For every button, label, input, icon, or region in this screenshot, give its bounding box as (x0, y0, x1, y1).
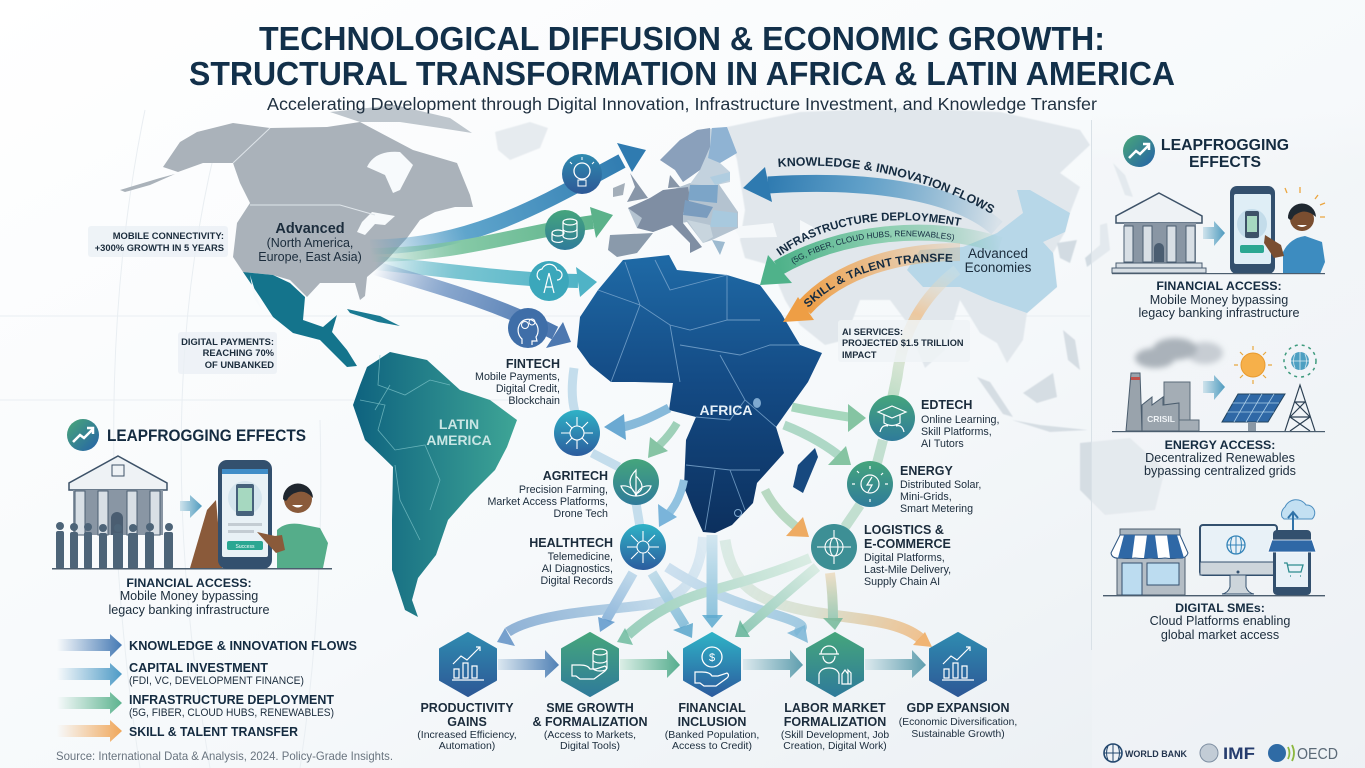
outcome: labor market formalization: Creation, Digital Work) (783, 741, 887, 752)
icon: right bank (1112, 193, 1206, 273)
icon circle: knowledge bulb (562, 154, 602, 194)
legend: infrastructure: (5G, FIBER, CLOUD HUBS, RENEWABLES) (129, 707, 334, 719)
map: East Asia advanced economies (907, 190, 1070, 313)
sector: healthtech: Digital Records (541, 575, 613, 587)
arrow: infrastructure deployment (760, 212, 994, 285)
heading: right leapfrogging: LEAPFROGGING (1161, 137, 1289, 154)
outcome: productivity gains: GAINS (447, 715, 487, 729)
outcome: labor market formalization: FORMALIZATION (784, 715, 886, 729)
legend (57, 634, 357, 742)
map: Latin America (243, 272, 517, 617)
sector: agritech: Market Access Platforms, (487, 496, 608, 508)
icon: arrow to mobile (180, 495, 202, 518)
icon circle: capital coins (545, 210, 585, 250)
sector: agritech: Drone Tech (554, 508, 608, 520)
text: left financial access: FINANCIAL ACCESS: (126, 576, 252, 590)
outcome: labor market formalization (781, 633, 889, 752)
title: TECHNOLOGICAL DIFFUSION & ECONOMIC GROWTH: (259, 20, 1105, 57)
icon: solar, sun, tower (1112, 345, 1325, 432)
arrows: Africa to sectors (572, 368, 866, 537)
icon: right arrow energy (1203, 375, 1225, 400)
text: digital SMEs (1150, 601, 1290, 642)
outcome: SME growth: & FORMALIZATION (532, 715, 648, 729)
label: Latin America: LATIN (439, 416, 479, 432)
heading: right leapfrogging: EFFECTS (1189, 154, 1261, 171)
sector: energy: Mini-Grids, (900, 491, 952, 503)
sector: logistics and e-commerce: Supply Chain AI (864, 576, 940, 588)
text: left financial access: legacy banking infrastructure (108, 603, 270, 617)
text: right financial access: legacy banking infrastructure (1138, 306, 1300, 320)
arrow: infrastructure deployment: (5G, FIBER, CLOUD HUBS, RENEWABLES) (792, 230, 954, 264)
sector: logistics and e-commerce: E-COMMERCE (864, 537, 951, 551)
text: right financial access: Mobile Money bypassing (1150, 293, 1288, 307)
arrow: infrastructure deployment: INFRASTRUCTURE DEPLOYMENT (776, 212, 962, 256)
sector: agritech: Precision Farming, (519, 484, 608, 496)
sector: logistics and e-commerce (811, 523, 951, 588)
icon circle: AI head (508, 308, 548, 348)
text: energy access: ENERGY ACCESS: (1165, 438, 1275, 452)
sector: healthtech: AI Diagnostics, (542, 563, 613, 575)
outcome: GDP expansion: GDP EXPANSION (906, 701, 1010, 715)
panel: right leapfrogging effects (1091, 112, 1365, 768)
legend: skill (57, 720, 298, 742)
text: left financial access (108, 576, 270, 617)
legend: knowledge: KNOWLEDGE & INNOVATION FLOWS (129, 638, 357, 653)
outcome: productivity gains: (Increased Efficiency, (417, 729, 517, 741)
legend: infrastructure (57, 692, 334, 719)
heading: left leapfrogging (67, 419, 306, 451)
sector: edtech: Online Learning, (921, 414, 999, 426)
outcome: SME growth (532, 633, 648, 752)
callout: mobile connectivity: +300% GROWTH IN 5 YEARS (95, 242, 224, 253)
title: STRUCTURAL TRANSFORMATION IN AFRICA & LATIN AMERICA (189, 55, 1175, 92)
sector: edtech (869, 395, 999, 450)
heading: left leapfrogging: LEAPFROGGING EFFECTS (107, 426, 306, 445)
outcome: GDP expansion: (Economic Diversification, (899, 717, 1017, 728)
callout: digital payments: OF UNBANKED (205, 359, 274, 370)
outcome: GDP expansion (899, 633, 1017, 740)
sector: logistics and e-commerce: Digital Platforms, (864, 552, 945, 564)
label: advanced North America: Advanced (275, 221, 345, 237)
logos: World Bank, IMF, OECD (1104, 744, 1338, 763)
sector: energy: Distributed Solar, (900, 479, 981, 491)
legend: capital (57, 660, 304, 687)
subtitle: Accelerating Development through Digital Innovation, Infrastructure Investment, and Knowledge Transfer (267, 94, 1097, 114)
outcome: financial inclusion: FINANCIAL (678, 701, 746, 715)
outcome: GDP expansion: Sustainable Growth) (911, 729, 1005, 740)
callout: mobile connectivity (88, 226, 228, 257)
sector: fintech (475, 357, 600, 456)
icon: bank with queue (52, 456, 332, 570)
callout: AI services: IMPACT (842, 350, 877, 360)
icon: right mobile money (1112, 186, 1325, 274)
text: right financial access: FINANCIAL ACCESS: (1156, 279, 1282, 293)
icon: storefront (1111, 529, 1188, 595)
label: advanced North America: Europe, East Asia) (258, 250, 362, 264)
text: right financial access (1138, 279, 1300, 320)
label: advanced economies: Economies (965, 260, 1032, 275)
callout: AI services (838, 320, 970, 362)
arrow: skill and talent transfer (783, 243, 960, 322)
label: advanced economies: Advanced (968, 246, 1028, 261)
callout: mobile connectivity: MOBILE CONNECTIVITY: (113, 230, 224, 241)
sector: energy (847, 461, 981, 515)
outcome: productivity gains (417, 633, 517, 752)
outcome: productivity gains: Automation) (439, 740, 495, 752)
outcome: financial inclusion: INCLUSION (678, 715, 746, 729)
sector: logistics and e-commerce: LOGISTICS & (864, 523, 944, 537)
outcome: labor market formalization: LABOR MARKET (784, 701, 886, 715)
sector: fintech: Mobile Payments, (475, 371, 560, 383)
legend: capital: (FDI, VC, DEVELOPMENT FINANCE) (129, 675, 304, 687)
arrow heads: outcomes (497, 615, 932, 647)
icon: factory and smoke: CRISIL (1147, 414, 1175, 424)
outcome: SME growth: Digital Tools) (560, 740, 620, 752)
heading: right leapfrogging (1123, 135, 1289, 171)
flow: outcome arrows between hexagons (498, 650, 926, 678)
callout: AI services: PROJECTED $1.5 TRILLION (842, 338, 964, 348)
arrow: faint chain link right (845, 270, 957, 527)
callout: digital payments: REACHING 70% (203, 347, 275, 358)
sector: energy: Smart Metering (900, 503, 973, 515)
outcome: SME growth: (Access to Markets, (544, 729, 636, 741)
label: advanced North America (258, 221, 362, 264)
arrow: knowledge and innovation flows (743, 157, 1002, 234)
map: light world background (0, 108, 1165, 768)
sector: edtech: EDTECH (921, 398, 972, 412)
callout: AI services: AI SERVICES: (842, 327, 903, 337)
outcome: SME growth: SME GROWTH (546, 701, 634, 715)
icon: mobile money phone and person (190, 460, 328, 569)
map: Europe (608, 127, 738, 257)
legend: knowledge (57, 634, 357, 657)
legend: infrastructure: INFRASTRUCTURE DEPLOYMENT (129, 692, 334, 707)
icon circle: cloud tower (529, 261, 569, 301)
sector: agritech (487, 459, 659, 520)
text: left financial access: Mobile Money bypassing (120, 589, 258, 603)
icon: monitor with globe (1200, 525, 1277, 594)
text: energy access: Decentralized Renewables (1145, 451, 1295, 465)
legend: skill: SKILL & TALENT TRANSFER (129, 724, 298, 739)
icon: mobile money phone and person: Success (236, 544, 255, 550)
sector: energy: ENERGY (900, 464, 953, 478)
sector: fintech: Blockchain (508, 395, 560, 407)
legend: capital: CAPITAL INVESTMENT (129, 660, 268, 675)
sector: edtech: Skill Platforms, (921, 426, 992, 438)
outcome: financial inclusion: Access to Credit) (672, 740, 752, 752)
logos: World Bank, IMF, OECD: WORLD BANK (1125, 749, 1187, 760)
icon: right arrow bank to mobile (1203, 221, 1225, 246)
icon: factory and smoke (1126, 338, 1223, 431)
label: Latin America: AMERICA (426, 432, 492, 448)
callout: digital payments: DIGITAL PAYMENTS: (181, 336, 274, 347)
outcome: financial inclusion (665, 633, 759, 752)
map: Africa (577, 255, 822, 533)
panel: left leapfrogging effects (52, 419, 332, 617)
map: North America (120, 105, 473, 300)
logos: World Bank, IMF, OECD: OECD (1297, 746, 1338, 763)
text: digital SMEs: Cloud Platforms enabling (1150, 614, 1290, 628)
title (189, 20, 1175, 92)
arrow flow: from advanced economies to Africa (370, 143, 646, 348)
label: Africa: AFRICA (700, 402, 752, 418)
outcome: financial inclusion: $ (709, 652, 715, 664)
outcome: financial inclusion: (Banked Population, (665, 729, 759, 741)
sector: edtech: AI Tutors (921, 438, 964, 450)
callout: digital payments (178, 332, 277, 374)
sector: logistics and e-commerce: Last-Mile Delivery, (864, 564, 951, 576)
sector: healthtech: HEALTHTECH (529, 536, 613, 550)
label: advanced North America: (North America, (267, 236, 353, 250)
sector: healthtech (529, 524, 666, 587)
sector: fintech: Digital Credit, (496, 383, 560, 395)
sector: agritech: AGRITECH (543, 469, 608, 483)
outcome: productivity gains: PRODUCTIVITY (420, 701, 514, 715)
sector: fintech: FINTECH (506, 357, 560, 371)
text: energy access (1144, 438, 1296, 478)
sector: healthtech: Telemedicine, (548, 551, 613, 563)
icon: phone shop and cloud (1103, 500, 1325, 596)
logos: World Bank, IMF, OECD: IMF (1223, 744, 1255, 763)
text: energy access: bypassing centralized grids (1144, 464, 1296, 478)
text: digital SMEs: global market access (1161, 628, 1279, 642)
arrow: knowledge and innovation flows: KNOWLEDGE & INNOVATION FLOWS (778, 157, 994, 213)
arrows: sectors to outcomes (508, 535, 920, 638)
text: digital SMEs: DIGITAL SMEs: (1175, 601, 1265, 615)
outcome: labor market formalization: (Skill Development, Job (781, 730, 889, 741)
source note: Source: International Data & Analysis, 2024. Policy-Grade Insights. (56, 749, 393, 763)
